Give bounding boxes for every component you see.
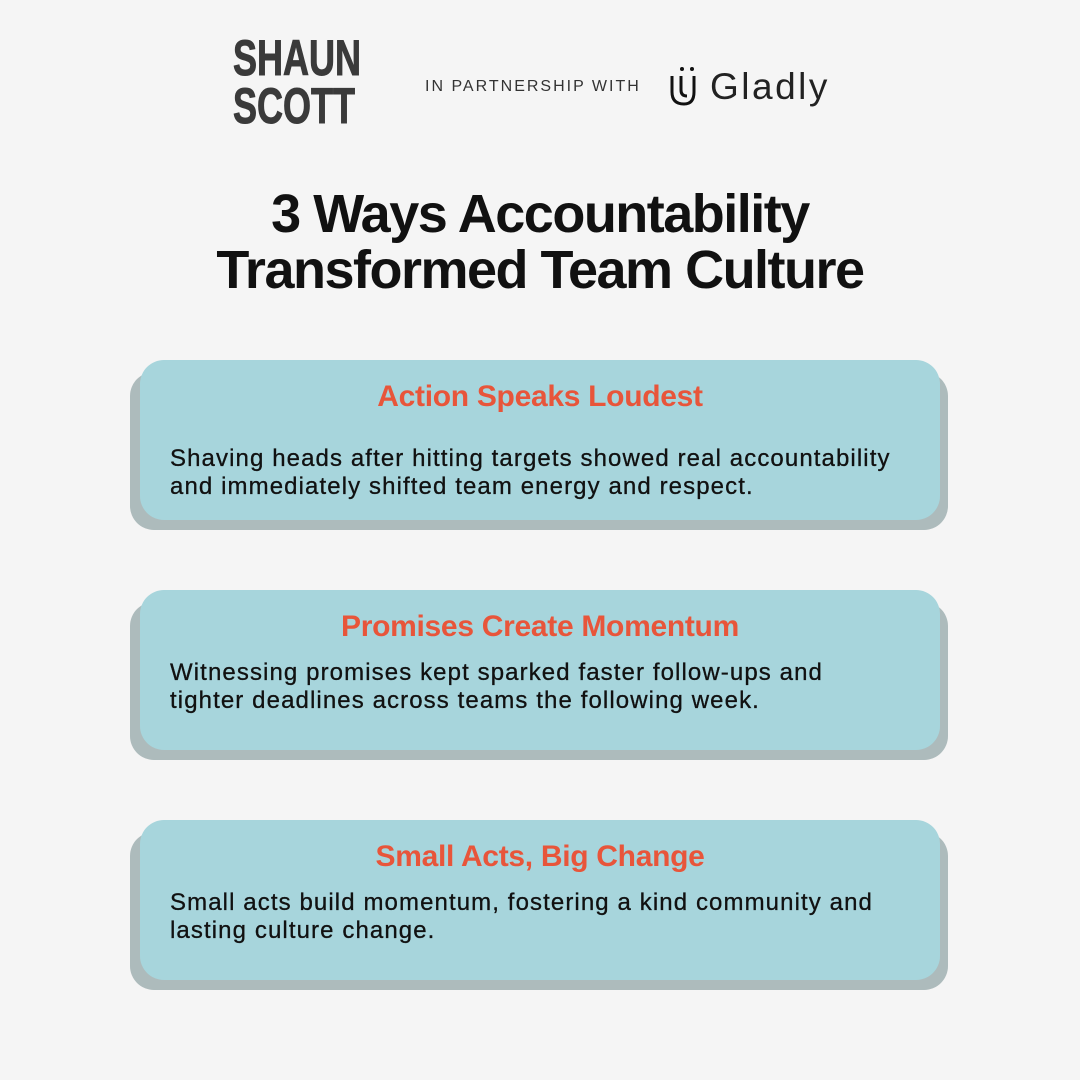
heading: Small Acts, Big Change [375,840,705,873]
body text: Shaving heads after hitting targets showed real accountability [170,445,891,472]
body text [170,889,873,944]
panel: Promises Create Momentum [140,590,940,750]
body text [170,659,823,714]
body text: tighter deadlines across teams the following week. [170,687,760,714]
body text [170,445,891,500]
partnership text: IN PARTNERSHIP WITH [425,78,641,95]
logo: Shaun Scott: SCOTT [233,78,355,134]
title: Transformed Team Culture [216,240,864,300]
body text: Small acts build momentum, fostering a kind community and [170,889,873,916]
body text: and immediately shifted team energy and respect. [170,473,754,500]
panel: Small Acts, Big Change [140,820,940,980]
heading: Promises Create Momentum [341,610,739,643]
heading: Action Speaks Loudest [377,380,703,413]
logo: Shaun Scott [233,30,361,134]
panel: card 3 shadow [130,832,948,990]
body text: Witnessing promises kept sparked faster follow-ups and [170,659,823,686]
title [216,184,864,300]
panel: card 1 shadow [130,372,948,530]
title: 3 Ways Accountability [271,184,809,244]
logo: Gladly: Gladly [710,66,830,107]
logo: Shaun Scott: SHAUN [233,30,361,86]
body text: lasting culture change. [170,917,435,944]
panel: card 2 shadow [130,602,948,760]
panel: Action Speaks Loudest [140,360,940,520]
